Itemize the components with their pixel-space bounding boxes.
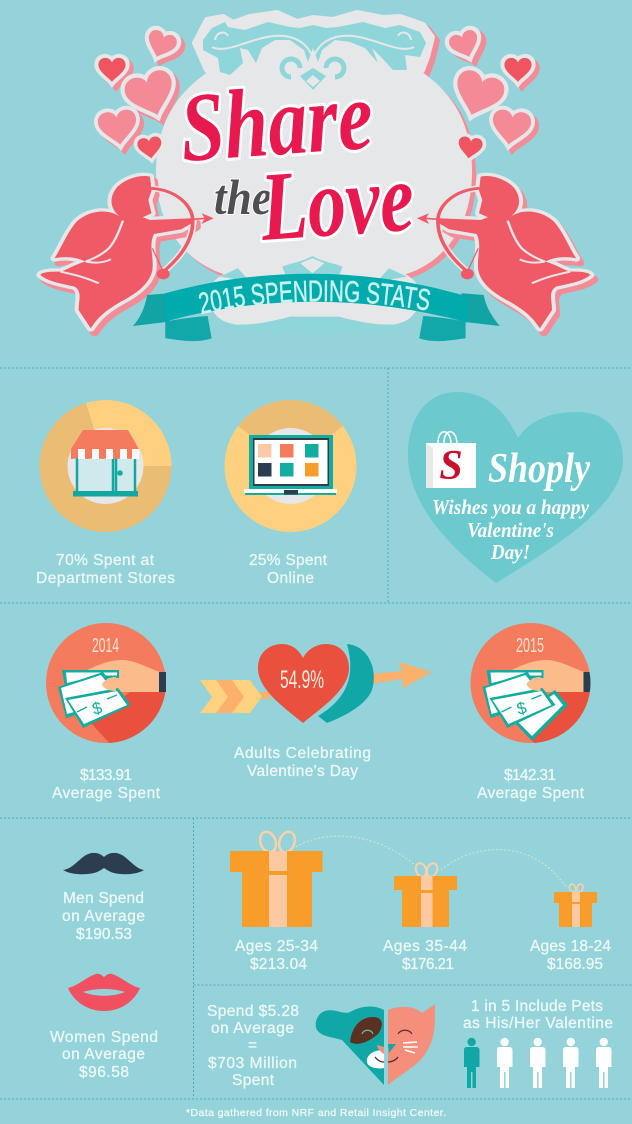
- message: [432, 495, 590, 564]
- panel: pets spending: [207, 998, 613, 1089]
- ribbon banner: 2015 SPENDING STATS: [198, 280, 430, 314]
- pets text: [463, 998, 613, 1032]
- pets text: 1 in 5 Include Pets: [471, 998, 603, 1015]
- logo: Shoply: Shoply: [488, 446, 590, 492]
- cupid right: [417, 176, 594, 333]
- section dividers: [0, 368, 632, 1099]
- icon: dog and cat heart: [316, 1004, 435, 1085]
- label: 35-44: Ages 35-44: [383, 938, 467, 955]
- ornate frame: [156, 13, 476, 333]
- icon: heart with arrow: [200, 644, 432, 723]
- icon: people: [464, 1038, 612, 1088]
- spend text: Spend $5.28: [207, 1003, 299, 1020]
- spend text: [207, 1003, 299, 1089]
- label: on Average: [62, 1046, 145, 1063]
- spend text: =: [248, 1037, 257, 1054]
- spend text: Spent: [232, 1072, 275, 1089]
- label: Valentine's Day: [247, 763, 358, 780]
- label: Men Spend: [63, 890, 144, 907]
- panel: men spend: [62, 853, 145, 943]
- header illustration: [36, 10, 598, 342]
- icon: laptop: [244, 435, 337, 495]
- label: 25% Spent: [249, 552, 328, 569]
- label: 25-34: $213.04: [250, 956, 307, 973]
- icon: small gift: [554, 883, 597, 927]
- title: Share the Love: Love: [256, 144, 417, 262]
- spend text: on Average: [211, 1020, 294, 1037]
- ribbon banner: [133, 274, 500, 342]
- label: Average Spent: [52, 785, 161, 802]
- label: Online: [267, 570, 314, 587]
- icon: lips: [68, 974, 140, 1011]
- pie: 25 percent: [224, 400, 356, 532]
- spend text: $703 Million: [208, 1055, 297, 1072]
- title: Share the Love: [177, 62, 417, 262]
- label: 18-24: Ages 18-24: [530, 938, 611, 955]
- label: 18-24: [530, 938, 611, 973]
- icon: storefront: [71, 430, 139, 496]
- hearts right: [446, 27, 536, 161]
- label: [36, 552, 175, 587]
- label: [249, 552, 328, 587]
- label: Adults Celebrating: [234, 745, 371, 762]
- label: [62, 890, 145, 943]
- label: 70% Spent at: [56, 552, 155, 569]
- panel: online: [224, 400, 356, 587]
- icon: shopping bag: S: [439, 443, 463, 489]
- label: $142.31: [504, 767, 556, 784]
- panel: women spend: [50, 974, 158, 1081]
- icon: medium gift: [394, 862, 457, 927]
- cupid left: [40, 176, 214, 333]
- icon: large gift: [230, 830, 322, 927]
- label: 25-34: Ages 25-34: [235, 938, 318, 955]
- title: Share the Love: Share: [177, 62, 376, 183]
- hearts left: [97, 27, 184, 161]
- message: Wishes you a happy: [432, 495, 590, 519]
- label: 25-34: [235, 938, 318, 973]
- label: [234, 745, 371, 780]
- icon: hand with money: [46, 623, 166, 743]
- icon: hand with money: 2015: [516, 635, 544, 657]
- label: $133.91: [80, 767, 132, 784]
- label: [50, 1029, 158, 1081]
- panel: 2014 spending: [46, 623, 175, 802]
- label: $190.53: [76, 926, 132, 943]
- heart: [408, 392, 623, 583]
- icon: hand with money: [470, 623, 590, 743]
- icon: mustache: [63, 853, 144, 874]
- pie: 70 percent: [40, 400, 172, 532]
- label: $96.58: [79, 1064, 129, 1081]
- label: Women Spend: [50, 1029, 158, 1046]
- label: [477, 767, 585, 802]
- footnote: *Data gathered from NRF and Retail Insight Center.: [186, 1107, 446, 1119]
- label: on Average: [62, 908, 145, 925]
- label: 18-24: $168.95: [547, 956, 603, 973]
- label: Department Stores: [36, 570, 175, 587]
- icon: hand with money: 2014: [92, 635, 119, 657]
- message: Valentine's: [467, 518, 554, 542]
- panel: Shoply greeting heart: [408, 392, 623, 583]
- label: [52, 767, 161, 802]
- label: 35-44: $176.21: [402, 956, 454, 973]
- icon: shopping bag: [426, 432, 476, 489]
- icon: heart with arrow: 54.9%: [280, 666, 324, 694]
- pets text: as His/Her Valentine: [463, 1015, 613, 1032]
- panel: department stores: [36, 400, 175, 587]
- label: Average Spent: [477, 785, 585, 802]
- panel: 2015 spending: [470, 623, 600, 802]
- title: Share the Love: the: [214, 169, 272, 225]
- message: Day!: [490, 540, 530, 564]
- panel: adults celebrating: [200, 644, 432, 780]
- dashed arcs: [296, 836, 566, 887]
- panel: gifts by age: [230, 830, 611, 973]
- label: 35-44: [383, 938, 467, 973]
